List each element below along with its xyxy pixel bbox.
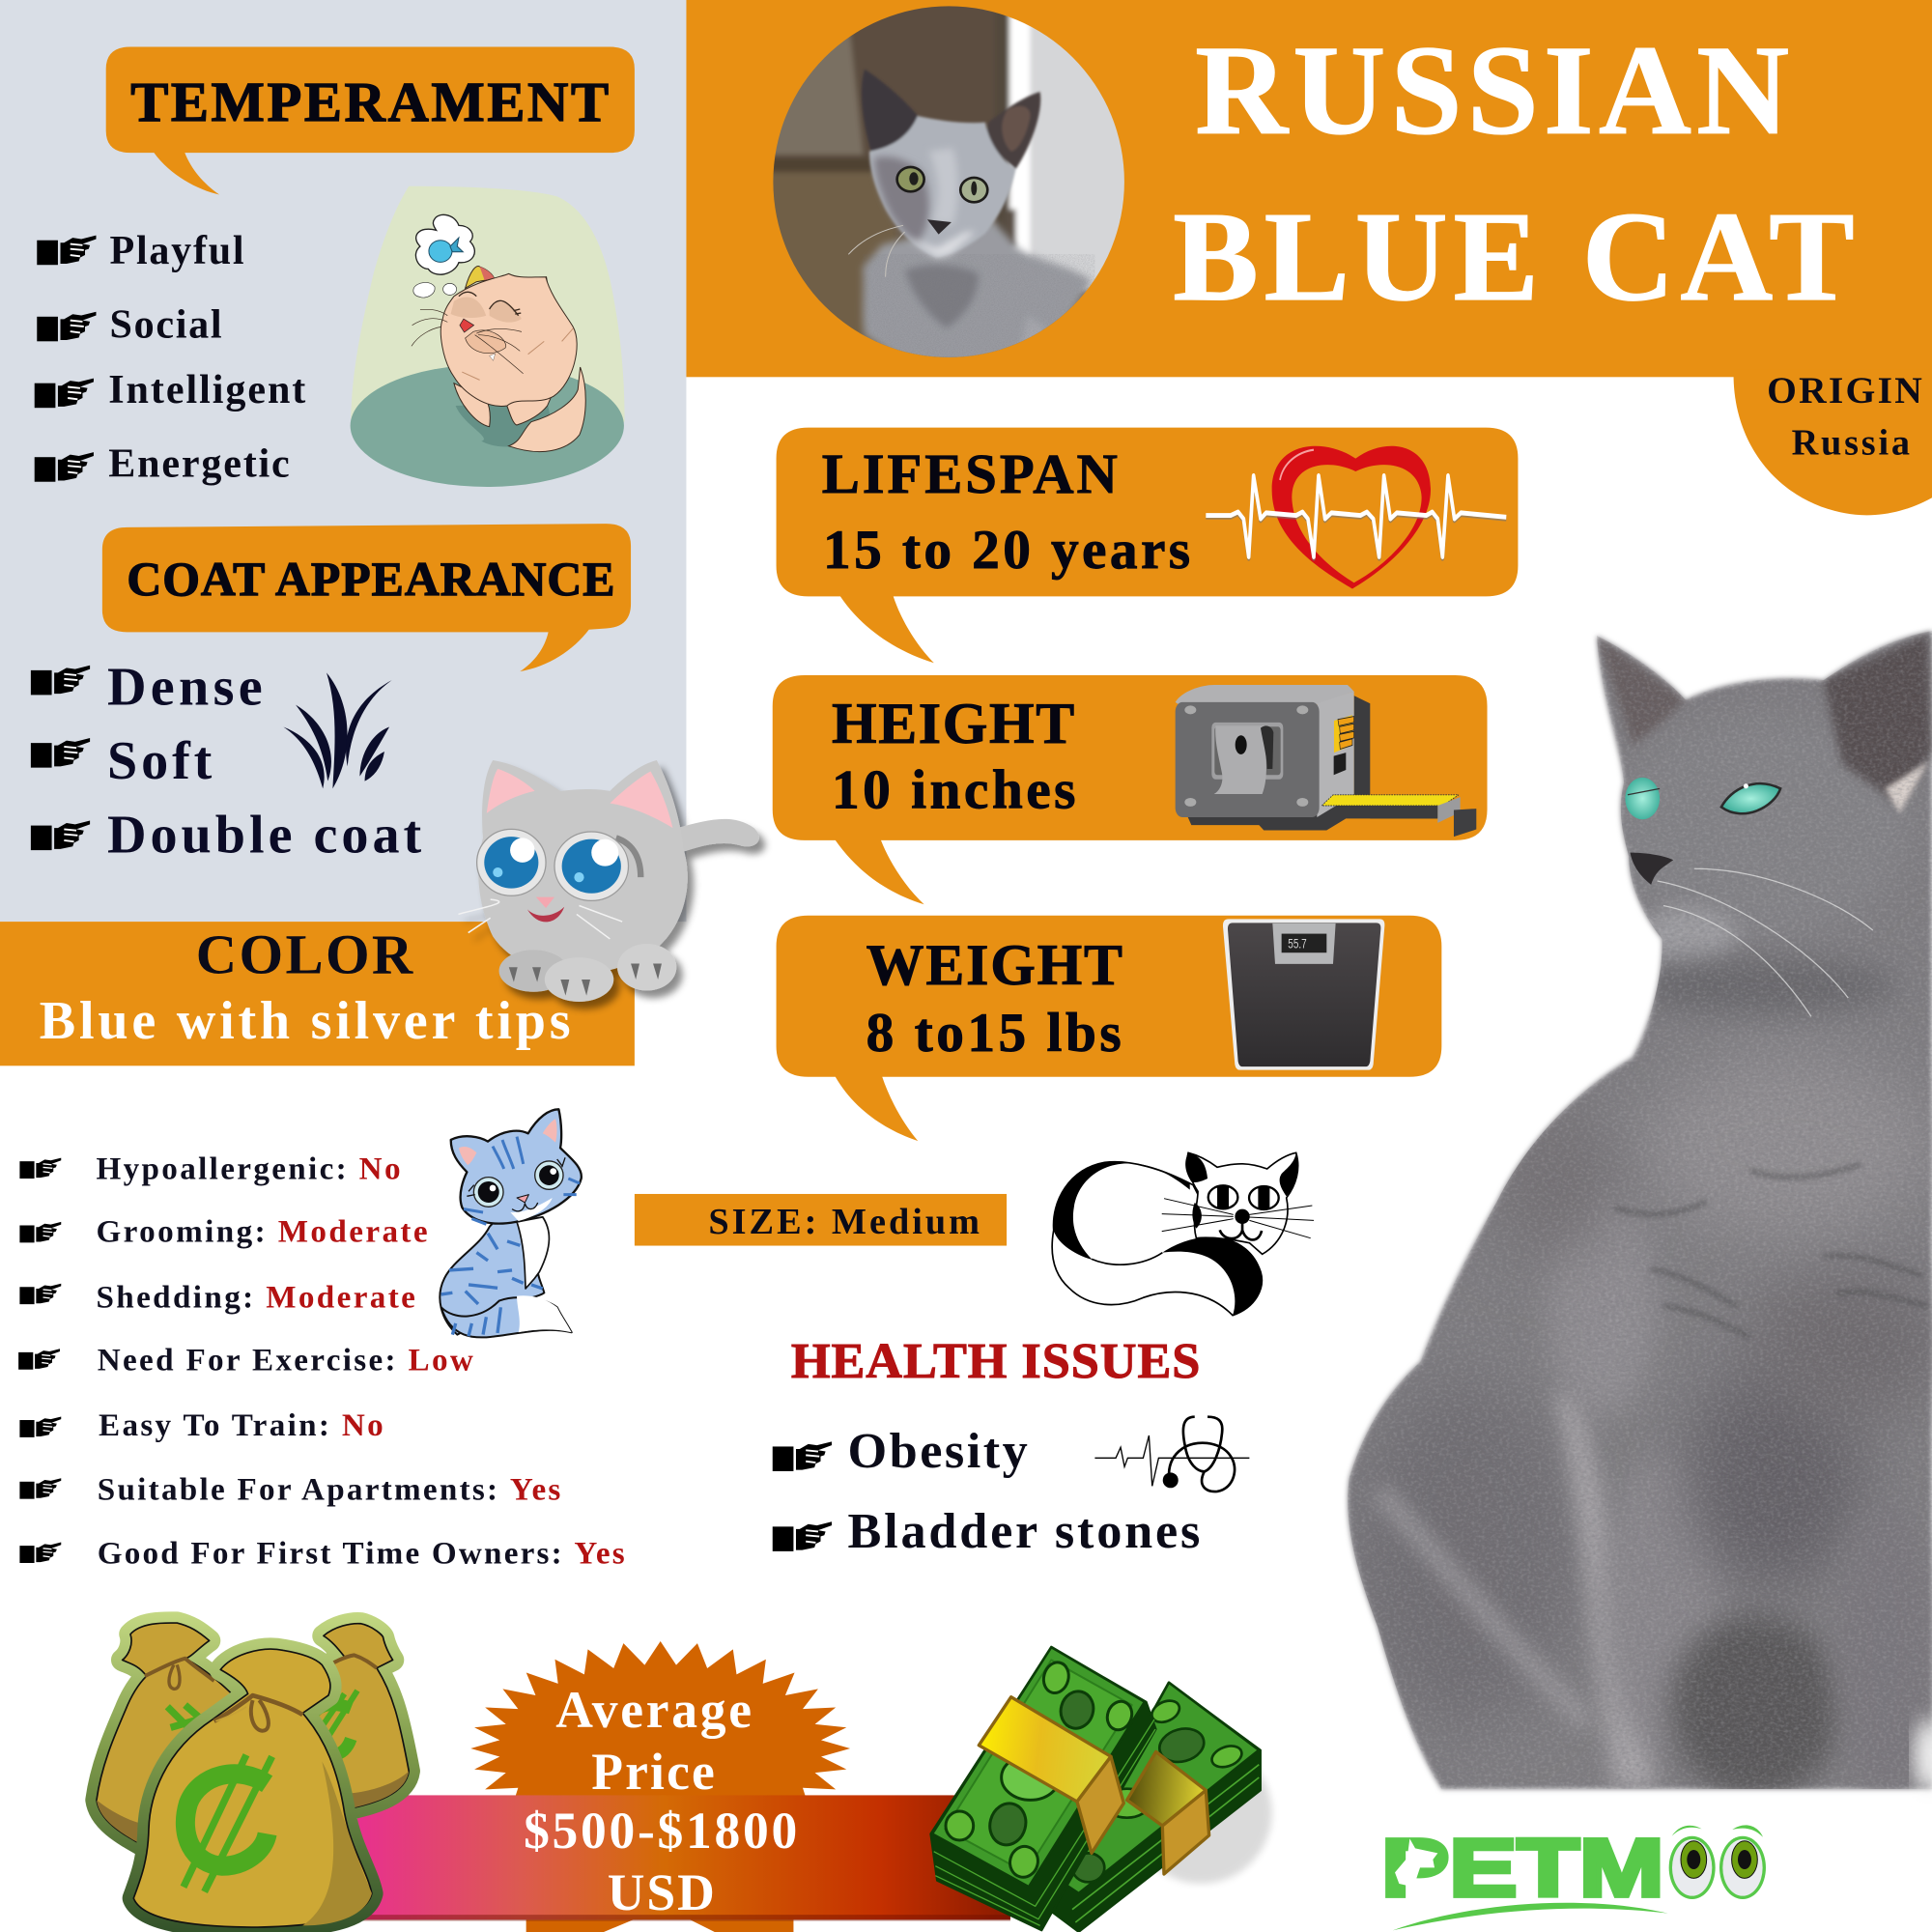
- photo: russian blue cat: [1343, 629, 1932, 1799]
- panel: left grey background: [0, 0, 686, 922]
- panel: color band: COLOR: [196, 923, 413, 986]
- item: good for first time owners: Good For First Time Owners: Yes: [98, 1536, 625, 1572]
- icon: heart with heartbeat: [1206, 446, 1506, 588]
- item: hypoallergenic: Hypoallergenic: No: [96, 1151, 401, 1187]
- item: dense: Dense: [107, 658, 263, 718]
- item: obesity: Obesity: [848, 1423, 1028, 1479]
- illustration: cash stacks: [930, 1647, 1272, 1932]
- item: soft: Soft: [107, 731, 213, 791]
- logo eye: left: [1669, 1826, 1716, 1899]
- logo: petmoo: [1381, 1822, 1766, 1930]
- price text: $500-$1800: [524, 1802, 797, 1860]
- head: [869, 116, 1016, 258]
- bag: right: [302, 1624, 409, 1809]
- nose: [1631, 853, 1673, 885]
- label: size: SIZE: Medium: [708, 1202, 980, 1242]
- bag: left: [97, 1623, 239, 1848]
- callout: height: [773, 675, 1488, 904]
- item: shedding: Shedding: Moderate: [96, 1279, 415, 1315]
- item: intelligent: Intelligent: [108, 367, 305, 412]
- illustration: blue tabby kitten: [440, 1109, 582, 1337]
- callout: height: 10 inches: [832, 760, 1076, 821]
- item: easy to train: Easy To Train: No: [99, 1407, 384, 1443]
- eye: left: [1625, 778, 1660, 819]
- title text: [1173, 19, 1855, 327]
- price text: Price: [591, 1743, 715, 1801]
- ears: [861, 70, 918, 152]
- callout: origin: [1734, 369, 1932, 515]
- item: need for exercise: Need For Exercise: Low: [98, 1342, 473, 1378]
- title text: RUSSIAN: [1195, 19, 1789, 161]
- price text: USD: [608, 1863, 715, 1921]
- list: health issues: [773, 1423, 1200, 1559]
- item: social: [37, 301, 222, 347]
- item: energetic: Energetic: [108, 441, 290, 487]
- callout: origin: ORIGIN: [1767, 369, 1922, 412]
- item: playful: [37, 228, 244, 273]
- nose: [927, 219, 952, 235]
- stack: front: [930, 1647, 1156, 1930]
- item: bladder stones: Bladder stones: [848, 1503, 1200, 1559]
- scale reading: 55.7: [1288, 936, 1307, 952]
- icon: black and white cat: [1052, 1152, 1314, 1316]
- illustration: grey kitten: [458, 760, 759, 1002]
- item: soft: [31, 731, 213, 791]
- body: [863, 219, 1092, 364]
- panel: title banner: [686, 0, 1932, 377]
- panel: color band: [0, 922, 635, 1065]
- item: playful: Playful: [110, 228, 244, 273]
- ribbon: price: [357, 1795, 1010, 1921]
- callout: weight: 8 to15 lbs: [867, 1003, 1122, 1064]
- callout: coat appearance heading: [102, 524, 631, 671]
- illustration: dreaming peach cat: [351, 186, 625, 487]
- callout: coat appearance heading: COAT APPEARANCE: [127, 553, 614, 606]
- eyes: [895, 166, 925, 193]
- badge: average price starburst: [470, 1641, 850, 1802]
- logo: petmoo: PETM: [1381, 1822, 1664, 1913]
- panel: color band: Blue with silver tips: [40, 991, 571, 1051]
- title text: BLUE CAT: [1173, 185, 1855, 327]
- callout: temperament heading: [106, 46, 635, 195]
- item: double coat: Double coat: [107, 806, 422, 866]
- callout: lifespan: LIFESPAN: [822, 442, 1118, 505]
- icon: tape measure: [1176, 685, 1476, 837]
- icon: stethoscope and heartbeat: [1094, 1417, 1249, 1492]
- logo eye: right: [1719, 1825, 1766, 1899]
- callout: lifespan: [777, 428, 1518, 663]
- ribbon tails: [526, 1919, 793, 1932]
- list: coat traits: [31, 658, 422, 866]
- photo: kitten portrait: [766, 0, 1133, 364]
- stack: rear: [1053, 1683, 1261, 1932]
- item: suitable for apartments: Suitable For Apartments: Yes: [98, 1471, 560, 1507]
- callout: weight: [777, 916, 1441, 1141]
- icon: weighing scale: [1223, 919, 1384, 1070]
- item: social: Social: [110, 301, 222, 347]
- callout: temperament heading: TEMPERAMENT: [130, 71, 609, 133]
- icon: fur tuft: [283, 672, 392, 788]
- price text: Average: [555, 1681, 752, 1739]
- label: size: [635, 1194, 1007, 1246]
- list: breed characteristics: [18, 1151, 625, 1572]
- paper band: rear: [1127, 1751, 1209, 1874]
- callout: origin: Russia: [1792, 423, 1910, 464]
- swoosh: [1393, 1903, 1668, 1930]
- paper band: front: [979, 1697, 1123, 1853]
- bag: front: [133, 1649, 372, 1927]
- dog silhouette: [1395, 1838, 1437, 1887]
- item: dense: [31, 658, 263, 718]
- eye: right: [1721, 783, 1780, 813]
- list: temperament traits: [35, 228, 305, 487]
- callout: weight: WEIGHT: [867, 933, 1122, 997]
- item: grooming: Grooming: Moderate: [96, 1214, 428, 1250]
- callout: lifespan: 15 to 20 years: [823, 520, 1190, 581]
- illustration: money bags: [97, 1623, 409, 1927]
- fur shading: [1343, 629, 1932, 1799]
- heading: health issues: HEALTH ISSUES: [791, 1333, 1200, 1389]
- price text: [524, 1681, 797, 1921]
- callout: height: HEIGHT: [832, 692, 1074, 755]
